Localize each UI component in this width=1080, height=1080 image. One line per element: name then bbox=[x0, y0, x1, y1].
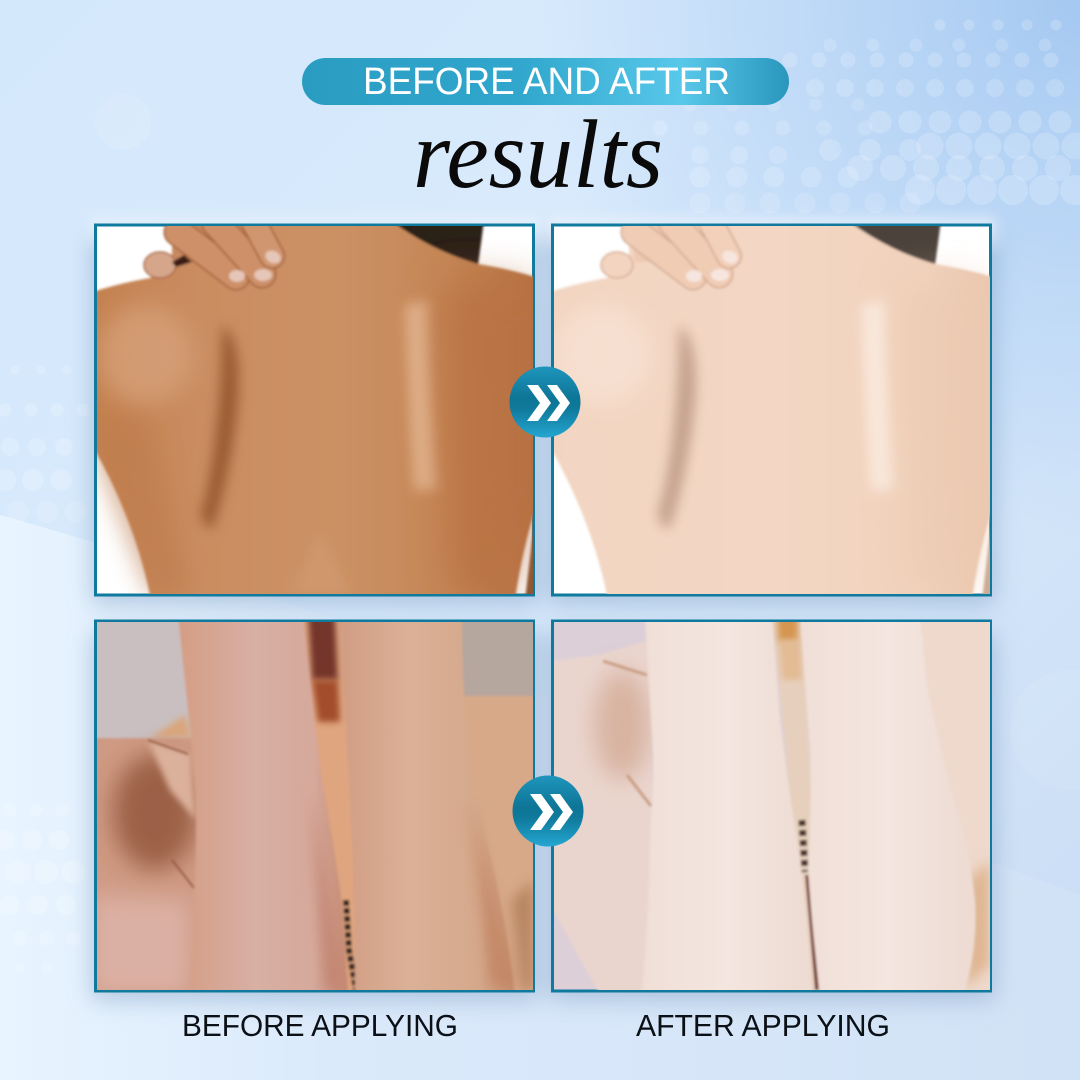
icon: arrow badge bottom bbox=[512, 776, 584, 846]
backdrop right bbox=[918, 622, 990, 990]
back body bbox=[549, 220, 995, 600]
panel: arms after bbox=[548, 615, 996, 995]
body right bbox=[463, 694, 533, 990]
panel: back after bbox=[549, 215, 995, 600]
orange fold bbox=[150, 715, 192, 738]
hand bbox=[601, 215, 740, 282]
backdrop bbox=[97, 622, 181, 623]
arm left bbox=[642, 615, 813, 995]
heading pill: before and after: BEFORE AND AFTER bbox=[363, 61, 730, 103]
heading pill: before and after bbox=[302, 58, 789, 105]
back shading bbox=[97, 280, 533, 594]
caption: after applying: AFTER APPLYING bbox=[636, 1008, 890, 1043]
back shading bbox=[554, 280, 990, 594]
hair bbox=[396, 226, 486, 266]
panel: arms before bbox=[90, 615, 540, 995]
arm left bbox=[178, 615, 348, 995]
arm right bbox=[800, 615, 976, 995]
center bbox=[772, 615, 822, 995]
back body bbox=[92, 220, 538, 600]
center gap bbox=[302, 622, 356, 990]
hand bbox=[144, 215, 283, 282]
panel: back before bbox=[92, 215, 538, 600]
far arm strip bbox=[524, 518, 533, 594]
hair bbox=[852, 226, 942, 266]
body left bbox=[90, 738, 200, 995]
icon: arrow badge top bbox=[510, 366, 580, 438]
caption: before applying: BEFORE APPLYING bbox=[182, 1008, 458, 1043]
panel shadows bbox=[90, 218, 995, 1000]
body left bbox=[554, 642, 652, 990]
arm right bbox=[337, 615, 515, 995]
title: results: results bbox=[413, 101, 663, 209]
far arm strip bbox=[980, 518, 990, 594]
